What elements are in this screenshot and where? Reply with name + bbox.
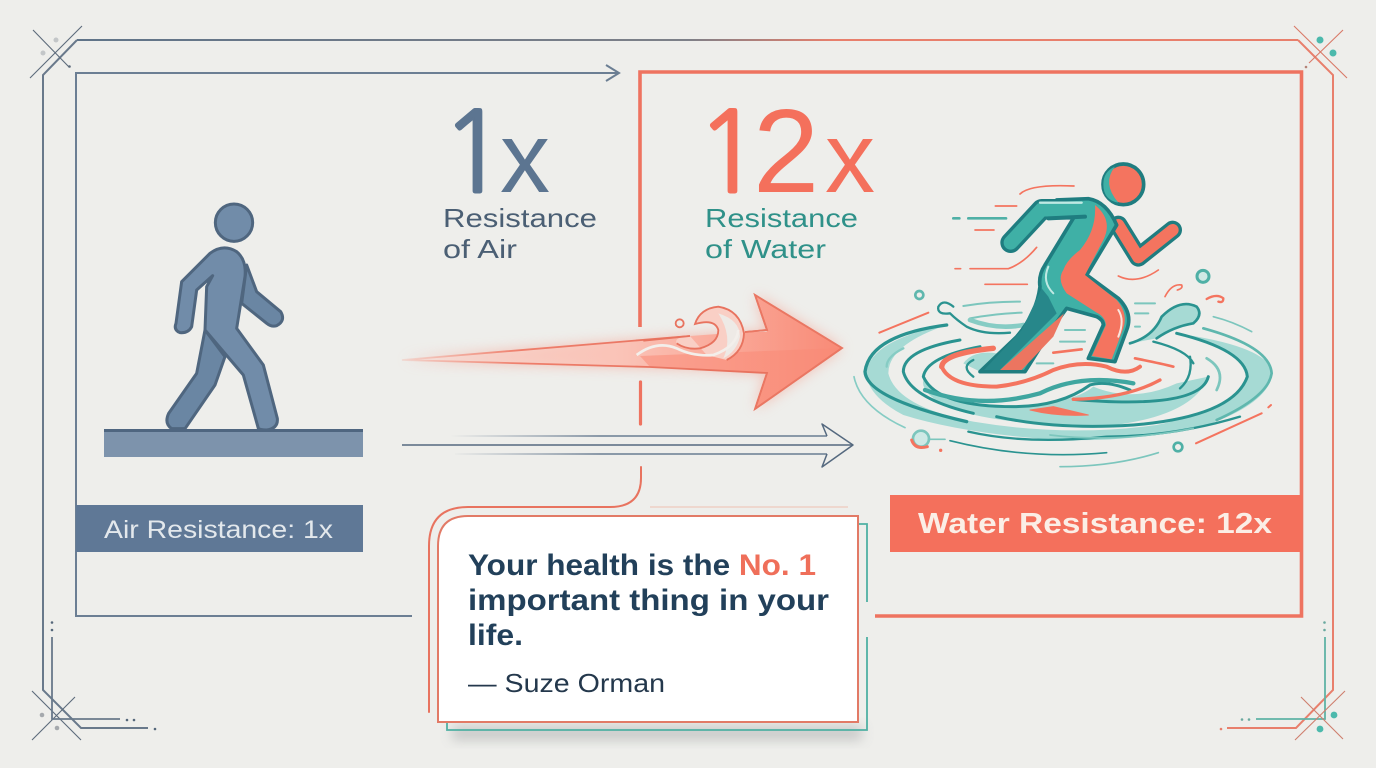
quote card [438,516,867,740]
label: water resistance [890,495,1302,552]
corner ornament: top right [1294,26,1347,78]
quote text: Your health is the No. 1 [468,549,816,582]
stat: 1x resistance of air: of Air [443,234,517,264]
label: air resistance: Air Resistance: 1x [104,516,334,544]
connector: curved line to quote card [429,467,848,712]
quote text: important thing in your [468,584,829,617]
icon: walking person [167,204,283,430]
splash left [938,302,1010,333]
arrow: large coral resistance arrow [402,295,842,409]
runner arm, front [1011,209,1083,243]
stat: 12x resistance of water: of Water [705,234,826,264]
stat: 12x resistance of water [695,85,875,264]
icon: running figure in water [854,164,1273,467]
corner ornament: top left [30,26,82,78]
water ripples [854,186,1273,467]
runner arm, back [1118,225,1173,257]
icon: wave curl on arrow [637,307,744,360]
label: air resistance [76,505,363,552]
stat: 12x resistance of water: 2 [753,85,819,218]
quote attribution: — Suze Orman [468,668,665,698]
splash right [1130,304,1199,343]
stat: 1x resistance of air: Resistance [443,203,597,233]
droplets [915,291,923,299]
stat: 1x resistance of air: x [500,102,550,214]
ground bar [104,429,363,457]
quote text [468,549,829,652]
panel: water resistance frame [640,72,1302,616]
arrow: thin triple-line air arrow [402,424,853,467]
stat: 12x resistance of water: Resistance [705,203,858,233]
label: water resistance: Water Resistance: 12x [918,508,1272,540]
corner ornament: bottom left [32,621,156,740]
stat: 12x resistance of water: 1 [695,97,763,209]
walking figure on ground [104,204,363,457]
runner body [980,199,1129,372]
corner ornament: bottom right [1220,621,1345,740]
stat: 1x resistance of air [440,97,597,264]
speed lines [955,186,1158,284]
quote text: life. [468,619,523,652]
panel: air resistance frame with arrow [76,65,619,616]
stat: 12x resistance of water: x [825,102,875,214]
stat: 1x resistance of air: 1 [440,97,508,209]
runner head [1103,164,1144,205]
